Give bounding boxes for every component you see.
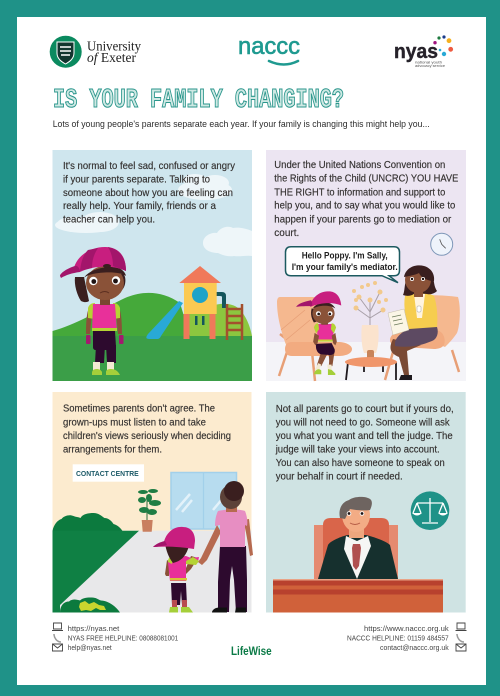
logo: nyas: advocacy service <box>415 64 445 68</box>
court text: your behalf in court if needed. <box>276 472 403 483</box>
court text <box>275 404 454 483</box>
judge <box>318 497 398 579</box>
NYAS text: https://nyas.net <box>68 626 119 633</box>
right armchair <box>385 295 460 380</box>
playground <box>146 266 242 340</box>
panel: parents disagree <box>52 392 253 612</box>
icon: scales of justice <box>411 491 449 530</box>
feelings text: really help. Your family, friends or a <box>63 201 216 212</box>
footer: NACCC contacts <box>347 623 466 652</box>
logo: naccc: naccc <box>238 33 300 60</box>
speech bubble: Hello Poppy. I'm Sally, <box>302 250 388 260</box>
mediator <box>388 265 438 380</box>
judge bench <box>273 579 443 612</box>
NACCC text: https://www.naccc.org.uk <box>364 626 449 633</box>
court text: You can also have someone to speak on <box>276 458 445 469</box>
feelings text: It's normal to feel sad, confused or angry <box>63 161 236 172</box>
judge chair <box>314 518 398 580</box>
glass door <box>171 472 236 529</box>
rights text <box>274 160 458 239</box>
parents text: grown-ups must listen to and take <box>63 417 206 428</box>
parents text: arrangements for them. <box>63 444 162 455</box>
feelings text <box>63 161 236 226</box>
icon: wall clock <box>431 233 453 255</box>
logo: University of Exeter <box>50 36 141 68</box>
NACCC text: NACCC HELPLINE: 01159 484557 <box>347 636 449 642</box>
court text: judge will take your views into account. <box>275 444 440 455</box>
logo: University of Exeter: University <box>87 40 141 54</box>
rights text: help you, and to say what you would like to <box>274 201 456 212</box>
girl: seated <box>296 291 341 375</box>
NYAS text: NYAS FREE HELPLINE: 08088081001 <box>68 636 178 642</box>
NACCC text: contact@naccc.org.uk <box>380 645 449 652</box>
coffee table <box>345 357 397 380</box>
icon: envelope <box>456 644 466 651</box>
logo: nyas: nyas <box>394 41 438 63</box>
girl: standing sad <box>60 247 126 375</box>
logo: University of Exeter: of Exeter <box>87 51 136 66</box>
NACCC text <box>347 626 449 652</box>
vase with branches <box>352 281 388 360</box>
intro text: Lots of young people's parents separate each year. If your family is changing this might help you... <box>53 119 430 129</box>
footer: NYAS contacts <box>52 623 178 652</box>
NYAS text <box>68 626 178 652</box>
court text: you will not need to go. Someone will ask <box>276 417 450 428</box>
rights text: the Rights of the Child (UNCRC) YOU HAVE <box>274 174 458 185</box>
hedge and lawn <box>52 513 139 612</box>
logo: nyas <box>394 35 453 68</box>
icon: laptop <box>456 623 466 630</box>
panel: court <box>266 392 466 612</box>
NYAS text: help@nyas.net <box>68 645 112 652</box>
rights text: happen if your parents go to mediation or <box>274 214 452 225</box>
clouds <box>55 174 252 256</box>
parents text: children's views seriously when deciding <box>63 431 231 442</box>
rights text: court. <box>274 228 299 239</box>
hills and ground <box>52 293 252 381</box>
rights text: Under the United Nations Convention on <box>274 160 446 171</box>
child from behind <box>153 527 199 612</box>
court text: you what you want and tell the judge. The <box>276 431 453 442</box>
rights text: THE RIGHT to information and support to <box>274 187 446 198</box>
panel: feelings <box>52 150 252 381</box>
court text: Not all parents go to court but if yours do, <box>276 404 454 415</box>
icon: laptop <box>52 623 63 630</box>
logo: LifeWise: LifeWise <box>231 646 272 658</box>
panel: your rights <box>266 150 466 381</box>
speech bubble: I'm your family's mediator. <box>292 262 398 272</box>
floor <box>52 531 252 612</box>
title: IS YOUR FAMILY CHANGING? <box>53 86 344 116</box>
feelings text: someone about how you are feeling can <box>63 188 233 199</box>
feelings text: if your parents separate. Talking to <box>63 174 210 186</box>
logo: nyas: national youth <box>415 60 442 64</box>
left armchair <box>277 297 352 381</box>
icon: phone <box>457 634 464 642</box>
feelings text: teacher can help you. <box>63 214 155 226</box>
contact centre sign <box>73 464 144 482</box>
potted plant <box>138 489 161 532</box>
icon: phone <box>54 634 61 642</box>
icon: envelope <box>52 644 62 651</box>
parents text: Sometimes parents don't agree. The <box>63 404 215 415</box>
contact centre sign: CONTACT CENTRE <box>76 469 139 478</box>
parents text <box>63 404 231 455</box>
parent from behind <box>198 481 253 612</box>
speech bubble <box>286 247 400 283</box>
